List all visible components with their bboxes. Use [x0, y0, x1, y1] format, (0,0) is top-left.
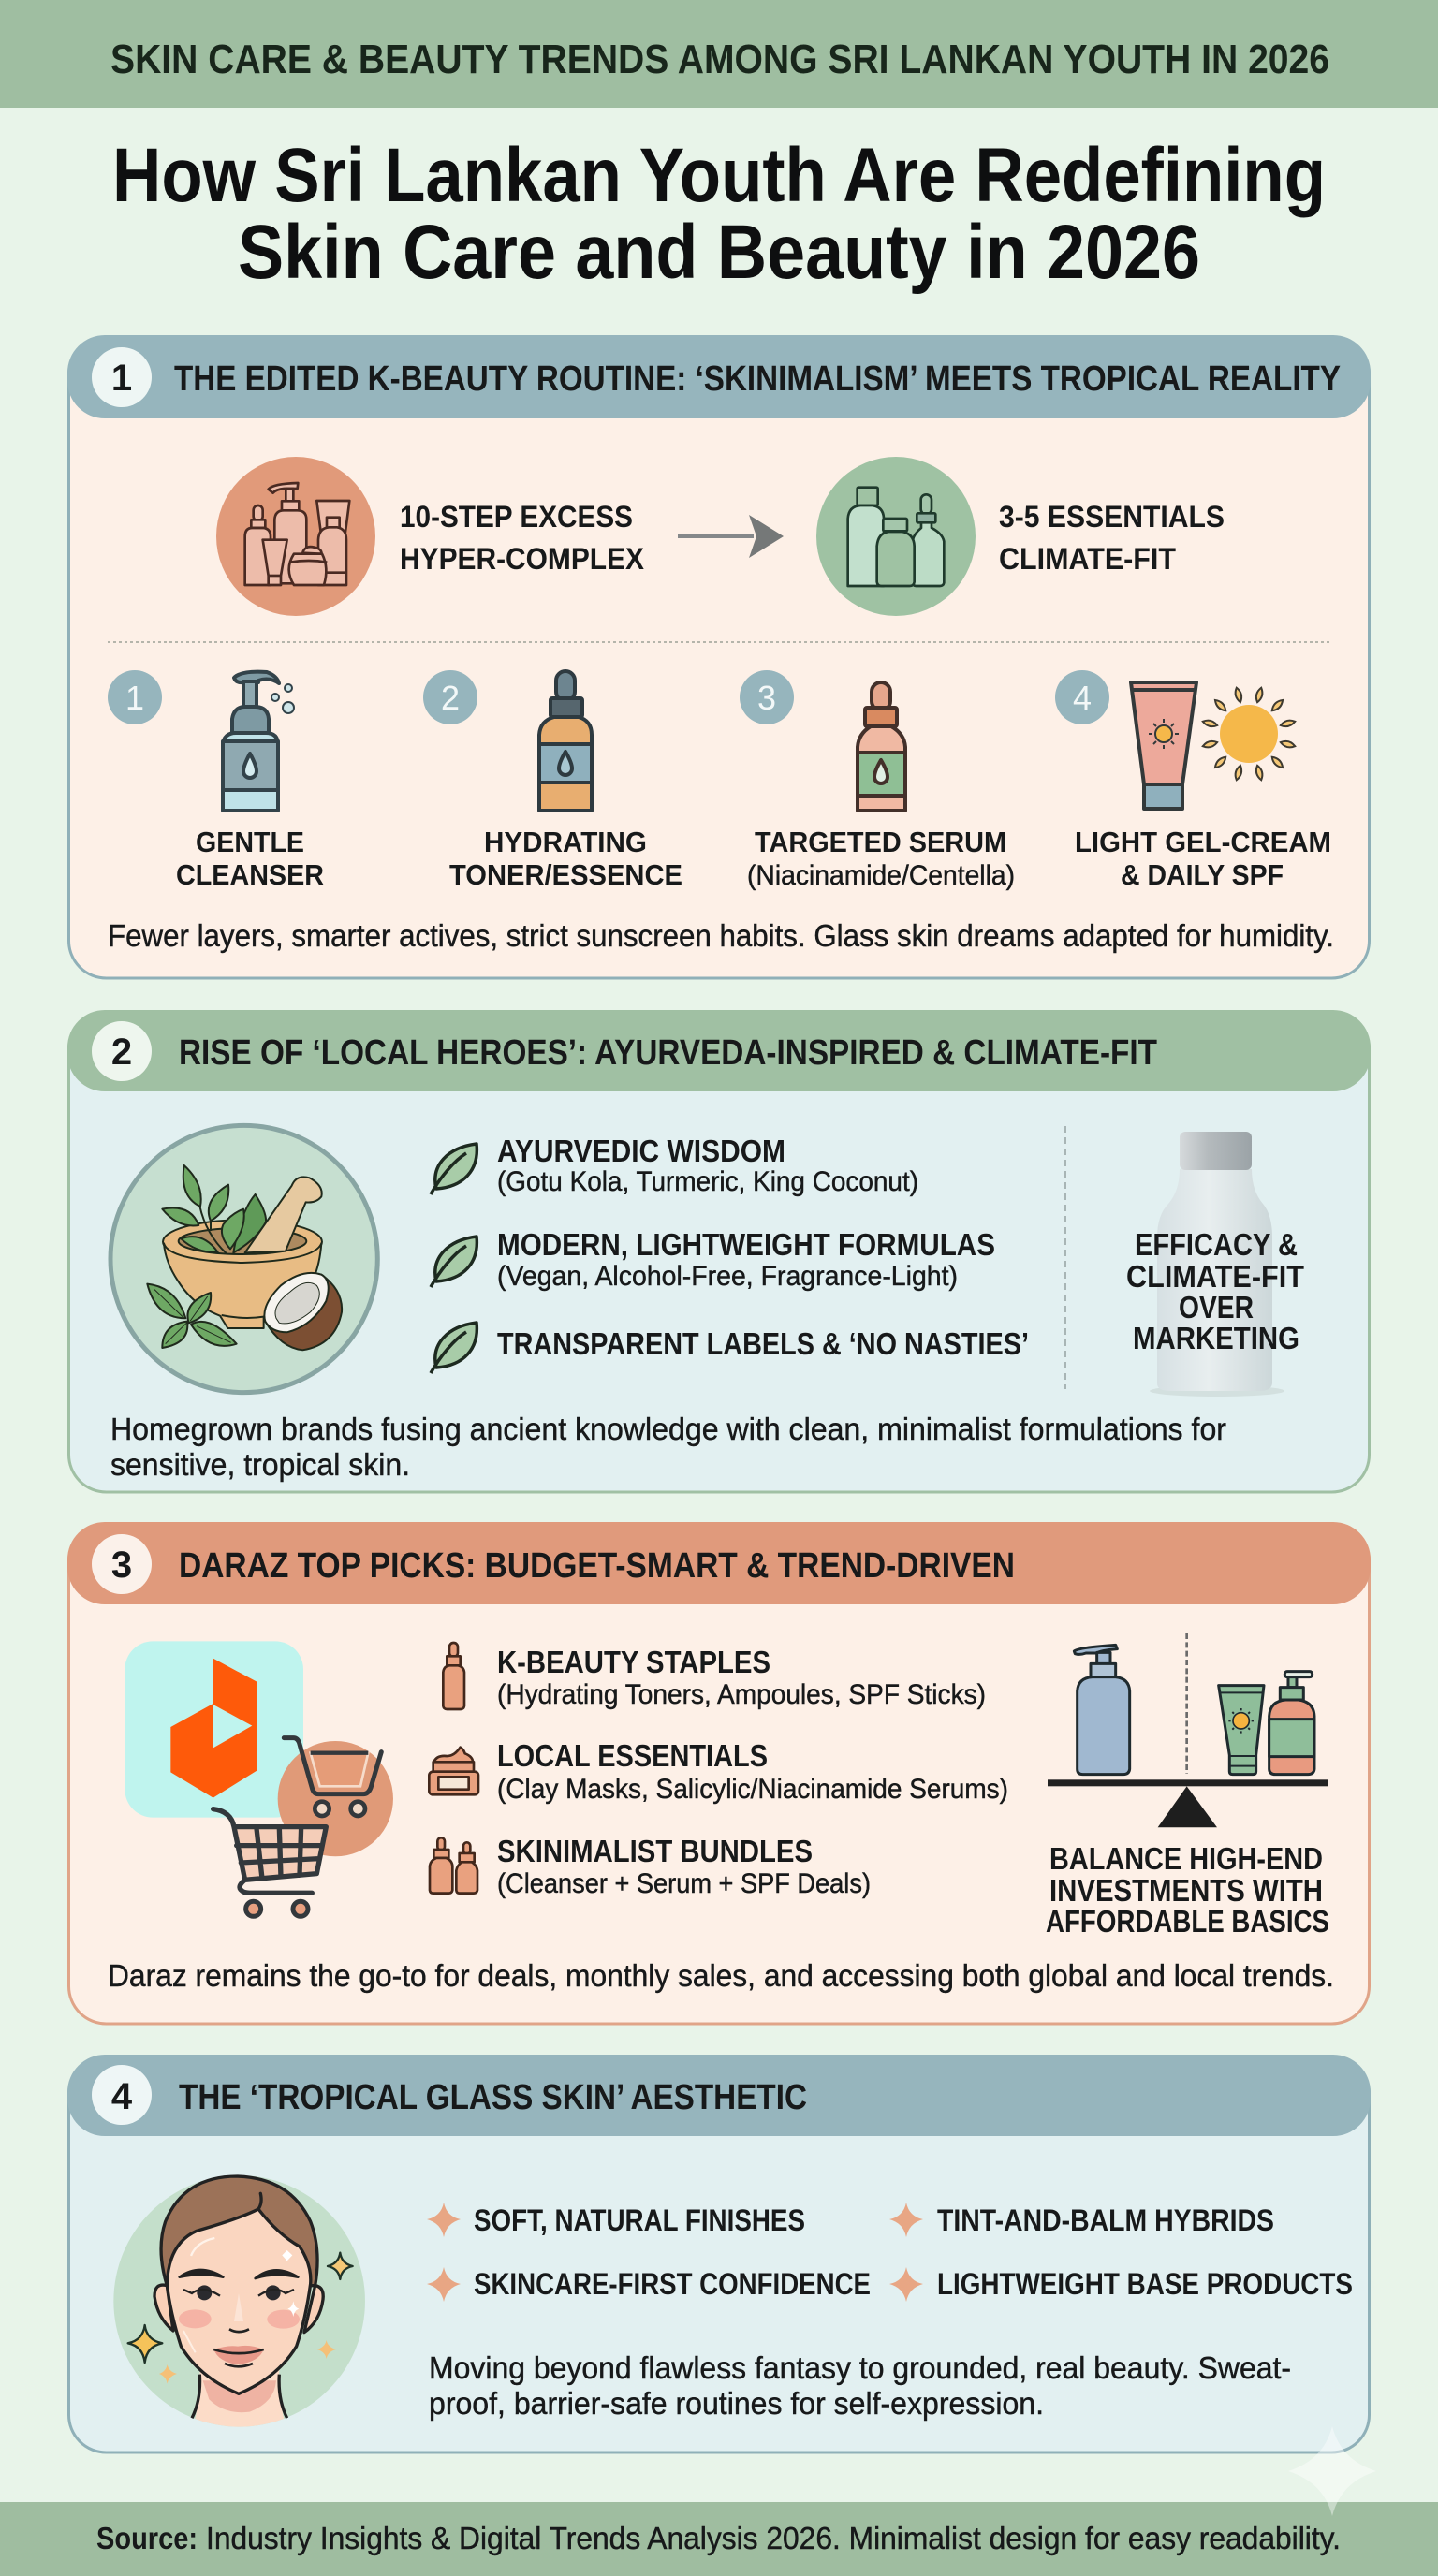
- step 2: hydrating toner: [423, 670, 682, 891]
- title: Skin Care and Beauty in 2026: [238, 210, 1200, 295]
- excess text: [400, 500, 645, 576]
- icon: three essentials in green circle: [816, 457, 976, 616]
- picks list: (Cleanser + Serum + SPF Deals): [497, 1868, 871, 1899]
- icon: serum duo: [430, 1837, 477, 1894]
- balance message: BALANCE HIGH-END: [1049, 1841, 1323, 1876]
- icon: balance scale with products: [1048, 1633, 1328, 1827]
- source footer: Industry Insights & Digital Trends Analysis 2026. Minimalist design for easy readability.: [206, 2521, 1341, 2555]
- section 4 header: [67, 2055, 1371, 2136]
- traits grid: TINT-AND-BALM HYBRIDS: [937, 2203, 1274, 2237]
- icon: many products in orange circle: [216, 457, 375, 616]
- icon: sun: [1202, 687, 1296, 781]
- panel: local heroes: [67, 1010, 1371, 1492]
- decorative white sparkle: [1288, 2426, 1376, 2516]
- step 4: gel-cream and SPF: & DAILY SPF: [1121, 858, 1284, 891]
- benefits list: (Vegan, Alcohol-Free, Fragrance-Light): [497, 1261, 958, 1292]
- icon: glowing face: [113, 2175, 365, 2431]
- step 1: gentle cleanser: GENTLE: [196, 826, 304, 858]
- benefits list: TRANSPARENT LABELS & ‘NO NASTIES’: [497, 1326, 1029, 1361]
- step 4: gel-cream and SPF: [1055, 670, 1331, 891]
- section 1 caption: Fewer layers, smarter actives, strict sunscreen habits. Glass skin dreams adapted for humidity.: [108, 918, 1334, 953]
- source footer: [0, 2502, 1438, 2576]
- icon: cream jar: [429, 1748, 478, 1794]
- section 2 header: [67, 1010, 1371, 1091]
- icon: frosted bottle with message: EFFICACY &: [1135, 1227, 1298, 1262]
- source footer: Source:: [96, 2521, 198, 2555]
- section 2 header: 2: [111, 1032, 132, 1073]
- section 2 caption: [110, 1412, 1226, 1482]
- step 4: gel-cream and SPF: 4: [1073, 679, 1092, 717]
- top banner: [0, 0, 1438, 108]
- section 2 caption: Homegrown brands fusing ancient knowledge with clean, minimalist formulations for: [110, 1412, 1226, 1446]
- essentials text: CLIMATE-FIT: [999, 542, 1176, 576]
- icon: leaf: [431, 1323, 477, 1373]
- icon: leaf: [431, 1144, 477, 1194]
- section 1 header: [67, 335, 1371, 418]
- picks list: LOCAL ESSENTIALS: [497, 1738, 768, 1773]
- icon: orange sparkle: [427, 2203, 461, 2237]
- excess text: HYPER-COMPLEX: [400, 542, 645, 576]
- panel: tropical glass skin: [67, 2055, 1371, 2452]
- icon: orange sparkle: [889, 2203, 923, 2237]
- title: [112, 133, 1326, 295]
- section 4 caption: proof, barrier-safe routines for self-expression.: [429, 2386, 1044, 2421]
- picks list: (Hydrating Toners, Ampoules, SPF Sticks): [497, 1679, 986, 1710]
- traits grid: SKINCARE-FIRST CONFIDENCE: [474, 2267, 871, 2301]
- step 2: hydrating toner: 2: [441, 679, 460, 717]
- icon: frosted bottle with message: MARKETING: [1133, 1321, 1299, 1355]
- section 4 header: THE ‘TROPICAL GLASS SKIN’ AESTHETIC: [179, 2078, 807, 2117]
- icon: leaf: [431, 1237, 477, 1287]
- step 3: targeted serum: [740, 670, 1015, 891]
- section 3 header: [67, 1522, 1371, 1604]
- icon: Daraz logo with shopping carts: [125, 1641, 393, 1916]
- icon: frosted bottle with message: OVER: [1179, 1290, 1254, 1325]
- picks list: K-BEAUTY STAPLES: [497, 1645, 770, 1679]
- benefits list: [431, 1134, 1029, 1373]
- panel: Daraz top picks: [67, 1522, 1371, 2024]
- essentials text: 3-5 ESSENTIALS: [999, 500, 1225, 534]
- step 3: targeted serum: TARGETED SERUM: [755, 826, 1006, 858]
- step 1: gentle cleanser: CLEANSER: [176, 858, 324, 891]
- icon: frosted bottle with message: CLIMATE-FIT: [1126, 1259, 1304, 1294]
- essentials text: [999, 500, 1225, 576]
- section 3 header: 3: [111, 1544, 132, 1586]
- section 3 caption: Daraz remains the go-to for deals, monthly sales, and accessing both global and local trends.: [108, 1958, 1334, 1993]
- step 2: hydrating toner: HYDRATING: [484, 826, 647, 858]
- arrow: [678, 515, 784, 558]
- step 1: gentle cleanser: [108, 670, 324, 891]
- icon: serum vial: [443, 1643, 464, 1709]
- traits grid: [427, 2203, 1353, 2302]
- traits grid: LIGHTWEIGHT BASE PRODUCTS: [937, 2267, 1353, 2301]
- section 4 caption: [429, 2350, 1291, 2421]
- section 4 header: 4: [111, 2076, 133, 2117]
- panel: edited K-beauty routine: [67, 335, 1371, 978]
- step 2: hydrating toner: TONER/ESSENCE: [449, 858, 682, 891]
- section 3 header: DARAZ TOP PICKS: BUDGET-SMART & TREND-DRIVEN: [179, 1546, 1015, 1586]
- picks list: SKINIMALIST BUNDLES: [497, 1834, 813, 1868]
- traits grid: SOFT, NATURAL FINISHES: [474, 2203, 805, 2237]
- step 1: gentle cleanser: 1: [125, 679, 144, 717]
- balance message: [1046, 1841, 1329, 1939]
- benefits list: MODERN, LIGHTWEIGHT FORMULAS: [497, 1227, 995, 1262]
- picks list: [429, 1643, 1008, 1899]
- balance message: AFFORDABLE BASICS: [1046, 1904, 1329, 1939]
- section 4 caption: Moving beyond flawless fantasy to grounded, real beauty. Sweat-: [429, 2350, 1291, 2385]
- icon: frosted bottle with message: [1126, 1132, 1304, 1397]
- benefits list: (Gotu Kola, Turmeric, King Coconut): [497, 1166, 918, 1197]
- excess text: 10-STEP EXCESS: [400, 500, 633, 534]
- picks list: (Clay Masks, Salicylic/Niacinamide Serums): [497, 1774, 1008, 1805]
- icon: mortar, pestle, herbs and coconut: [110, 1125, 377, 1393]
- step 4: gel-cream and SPF: LIGHT GEL-CREAM: [1075, 826, 1331, 858]
- section 2 header: RISE OF ‘LOCAL HEROES’: AYURVEDA-INSPIRED & CLIMATE-FIT: [179, 1033, 1157, 1073]
- icon: orange sparkle: [427, 2267, 461, 2302]
- step 3: targeted serum: (Niacinamide/Centella): [747, 860, 1015, 891]
- benefits list: AYURVEDIC WISDOM: [497, 1134, 785, 1168]
- section 1 header: 1: [111, 358, 132, 399]
- step 3: targeted serum: 3: [757, 679, 776, 717]
- section 2 caption: sensitive, tropical skin.: [110, 1447, 410, 1482]
- balance message: INVESTMENTS WITH: [1049, 1873, 1323, 1908]
- icon: orange sparkle: [889, 2267, 923, 2302]
